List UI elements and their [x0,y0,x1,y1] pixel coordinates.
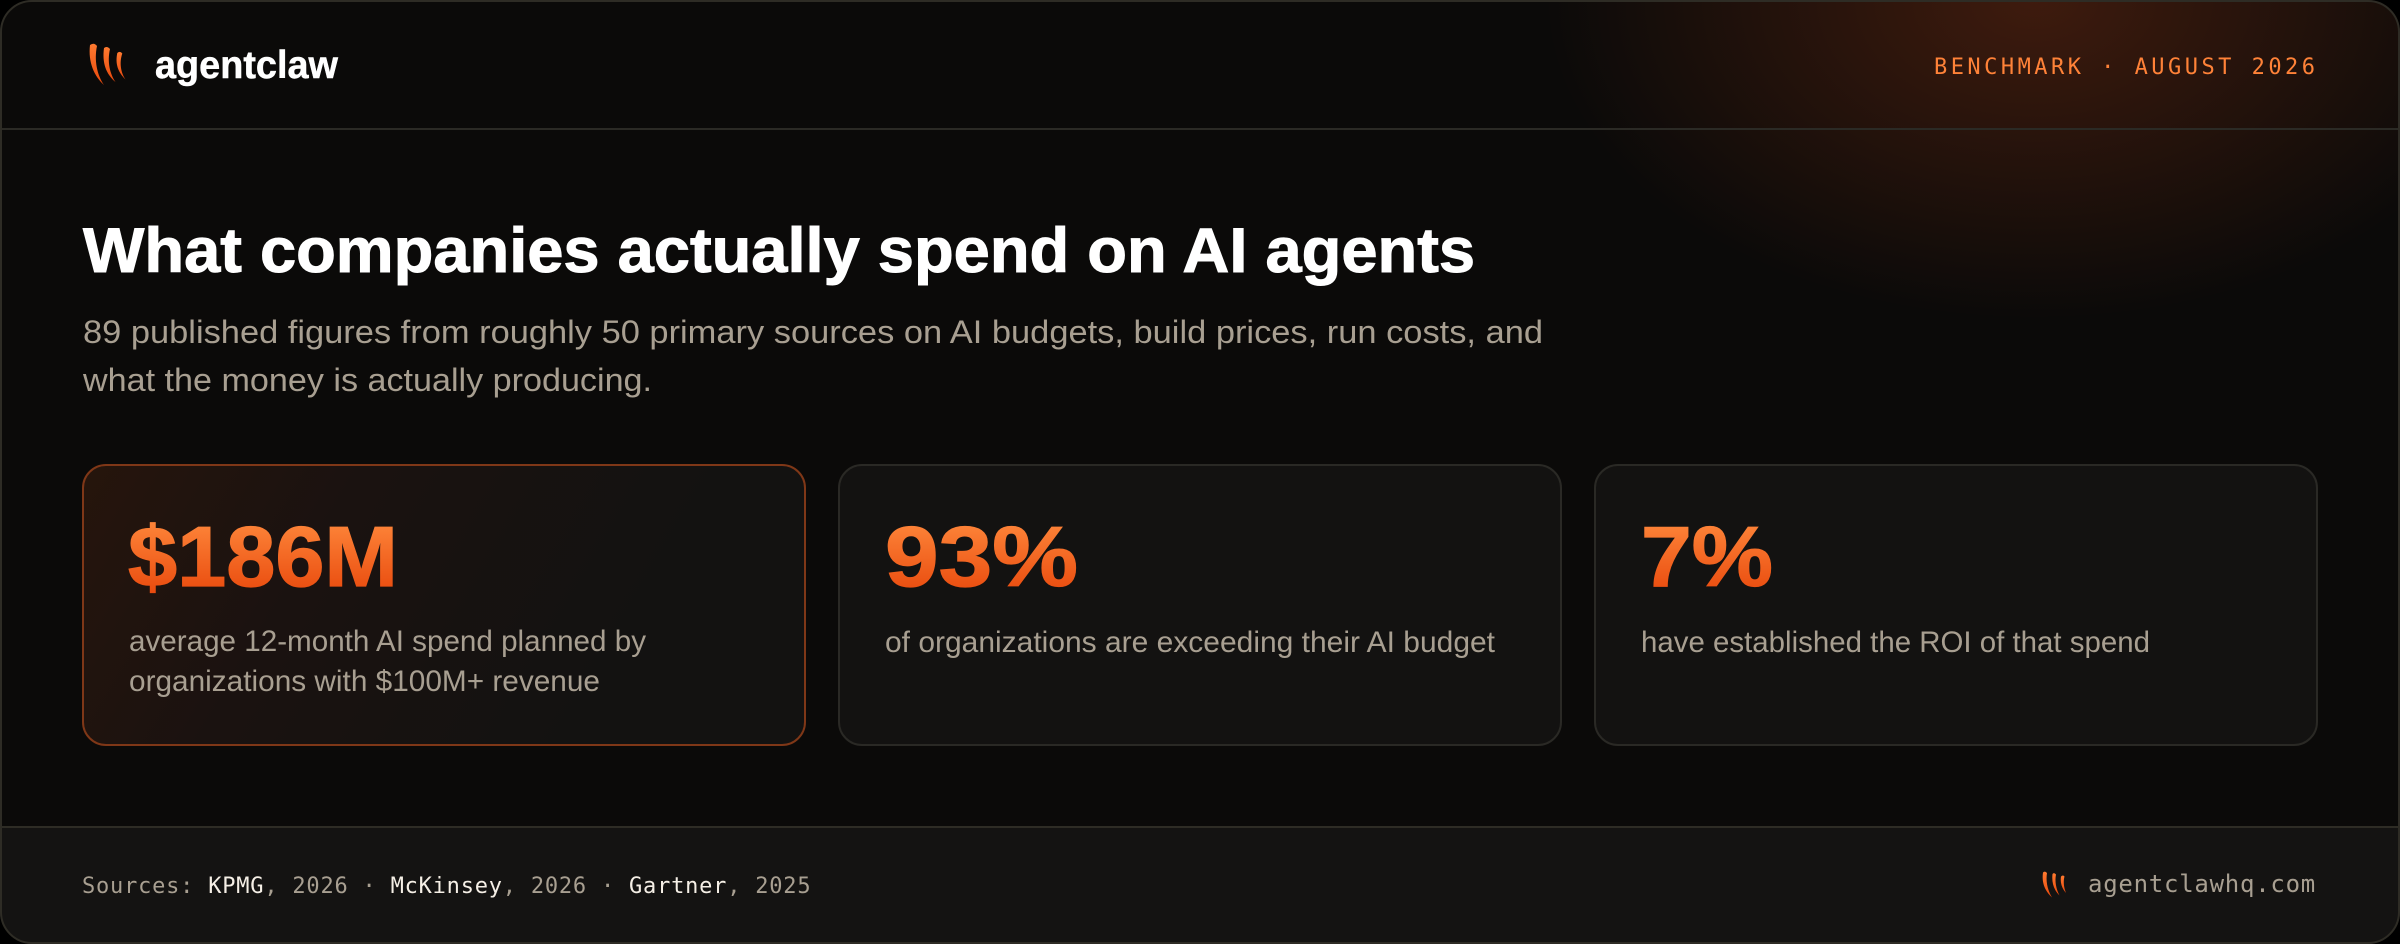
footer [82,870,2316,899]
stat description: average 12-month AI spend planned by [129,625,646,658]
panel: stat $186M [83,465,805,745]
icon: footer logo claws [2043,872,2066,898]
stat value: $186M [128,510,398,605]
stat description: organizations with $100M+ revenue [129,665,600,698]
stat description: of organizations are exceeding their AI budget [885,626,1495,659]
panel: stat 93% [839,465,1561,745]
icon: agentclaw logo claws [90,44,126,85]
brand name: agentclaw [155,44,339,87]
title: What companies actually spend on AI agents [83,216,1475,286]
subtitle: what the money is actually producing. [82,362,652,398]
header [90,44,2315,87]
stat value: 93% [885,510,1078,605]
benchmark date label: BENCHMARK · AUGUST 2026 [1934,55,2315,80]
website address: agentclawhq.com [2088,870,2316,898]
panel: stat 7% [1595,465,2317,745]
subtitle [82,314,1543,398]
stat description: have established the ROI of that spend [1641,626,2150,659]
sources line: Sources: KPMG, 2026 · McKinsey, 2026 · Gartner, 2025 [82,874,811,899]
stat description [129,625,646,698]
stat value: 7% [1641,510,1773,605]
subtitle: 89 published figures from roughly 50 primary sources on AI budgets, build prices, run costs, and [83,314,1543,350]
